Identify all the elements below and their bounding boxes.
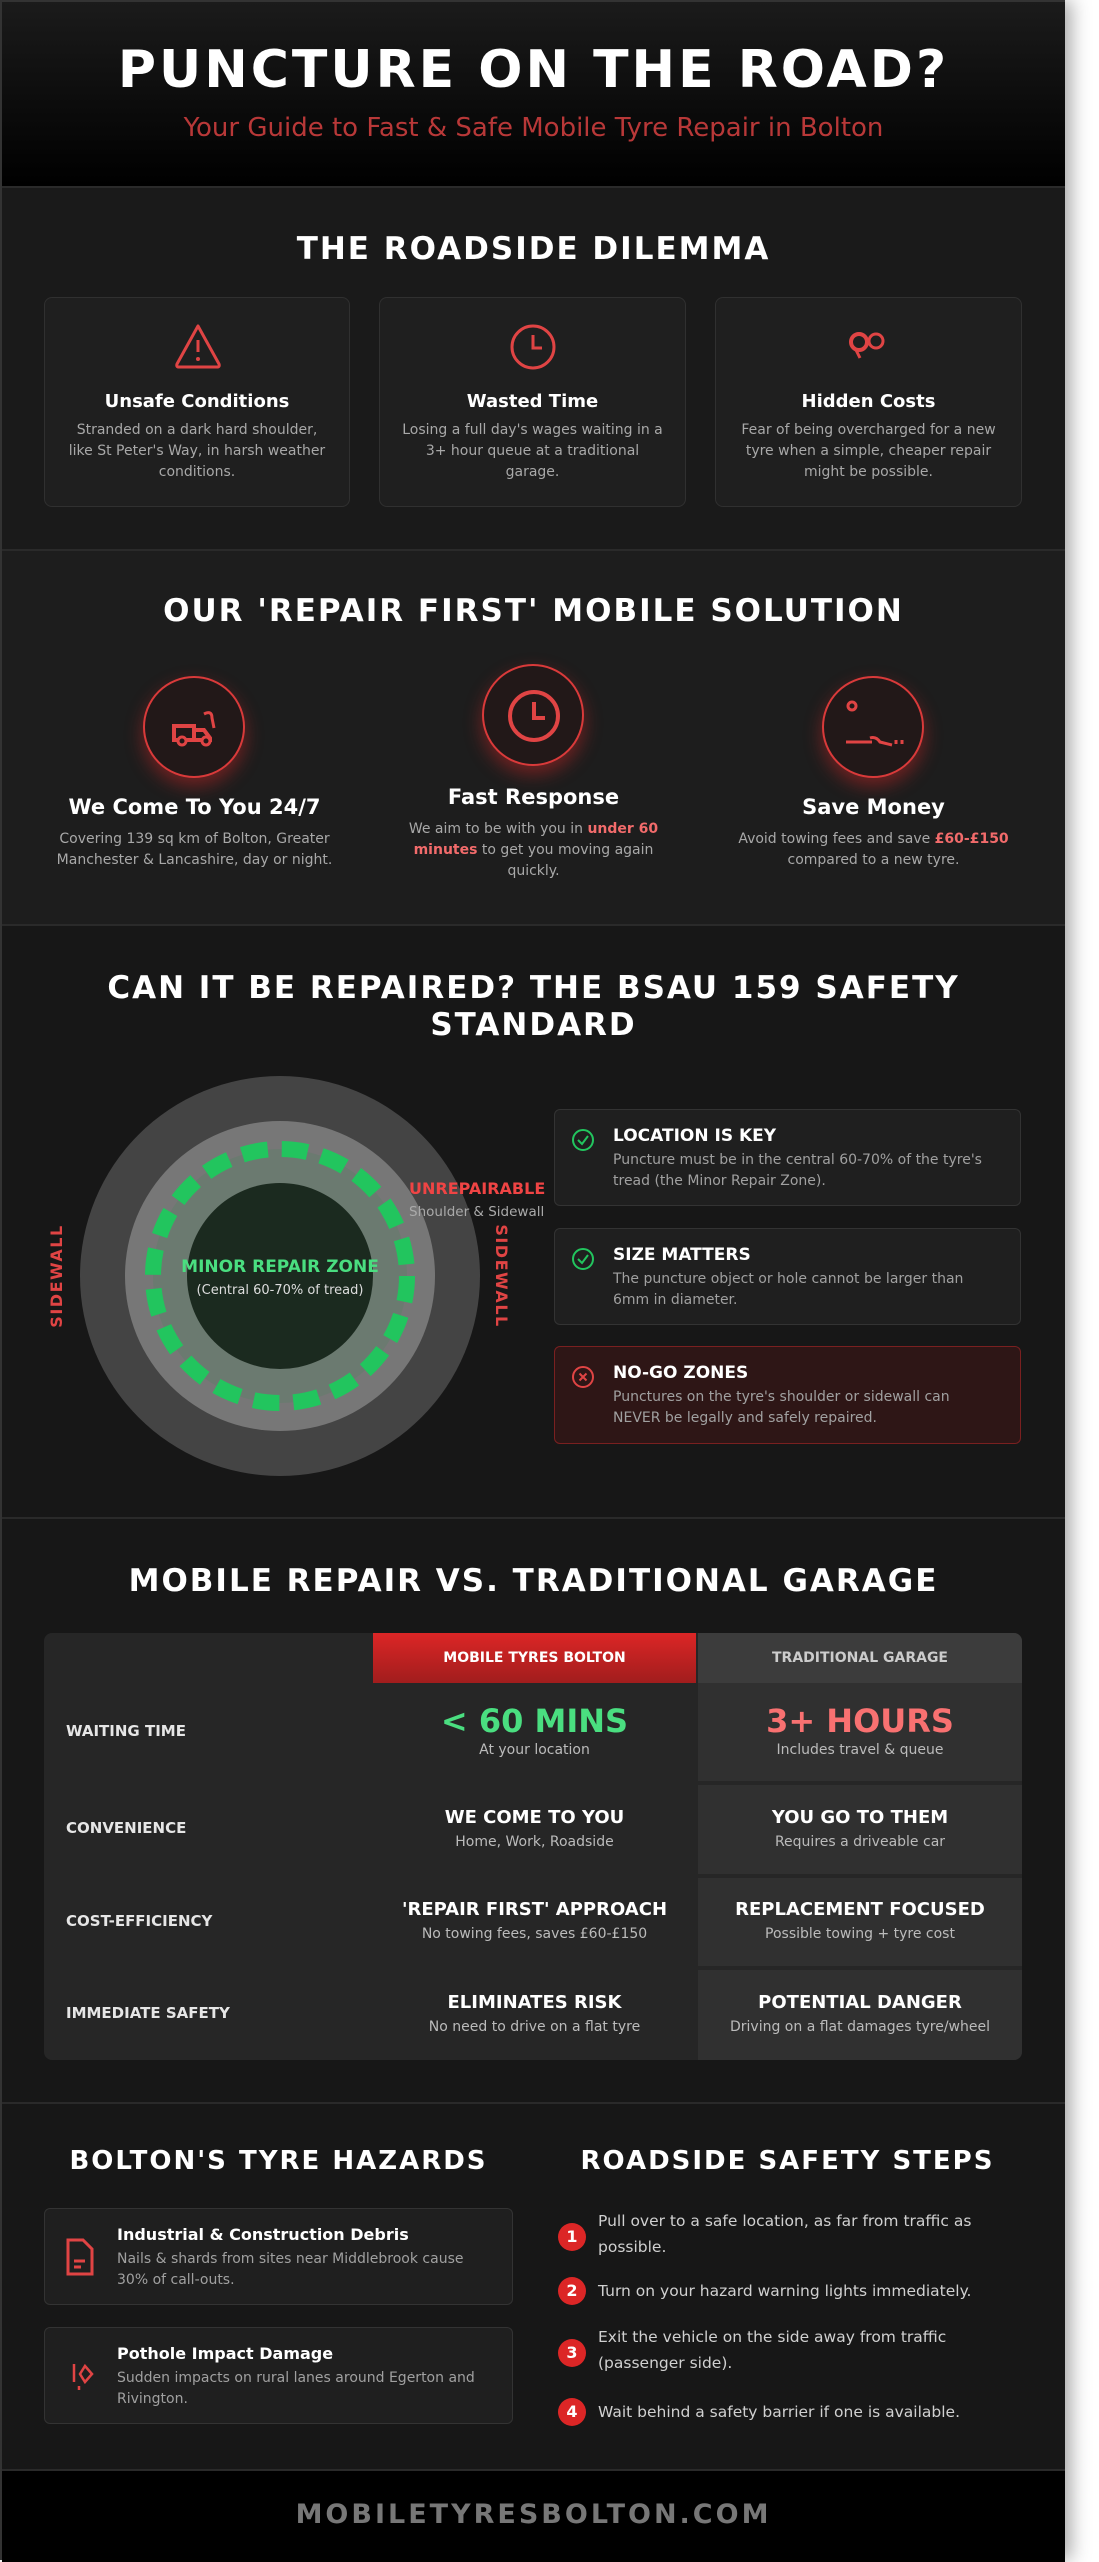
card: unsafe <box>44 297 350 507</box>
title: PUNCTURE ON THE ROAD? <box>118 40 949 100</box>
header <box>2 2 1065 188</box>
comparison table: YOU GO TO THEM <box>772 1807 948 1828</box>
comparison table: IMMEDIATE SAFETY <box>66 2004 230 2022</box>
tyre diagram: Shoulder & Sidewall <box>409 1204 544 1220</box>
heading: hazards: BOLTON'S TYRE HAZARDS <box>69 2146 488 2176</box>
step 2 <box>558 2277 971 2305</box>
step 2: Turn on your hazard warning lights immediately. <box>598 2282 971 2300</box>
hazard: debris <box>44 2208 513 2305</box>
tyre diagram: SIDEWALL <box>47 1224 66 1328</box>
card: wasted time: Wasted Time <box>467 391 598 412</box>
footer: MOBILETYRESBOLTON.COM <box>296 2499 771 2530</box>
heading: CAN IT BE REPAIRED? THE BSAU 159 SAFETY <box>107 970 960 1006</box>
comparison table: Home, Work, Roadside <box>455 1834 614 1850</box>
card: unsafe: Unsafe Conditions <box>105 391 289 412</box>
card: unsafe: Stranded on a dark hard shoulder, like St Peter's Way, in harsh weather conditions. <box>69 422 325 480</box>
footer <box>2 2471 1065 2562</box>
rule: size: The puncture object or hole cannot be larger than 6mm in diameter. <box>613 1271 963 1308</box>
feature: fast response: We aim to be with you in under 60 minutes to get you moving again quickly. <box>409 821 658 879</box>
rule: size <box>554 1228 1021 1325</box>
comparison table: Requires a driveable car <box>775 1834 945 1850</box>
comparison table <box>44 1633 1022 2060</box>
feature: save money: Avoid towing fees and save £60-£150 compared to a new tyre. <box>738 831 1009 868</box>
feature: come to you: We Come To You 24/7 <box>68 795 320 819</box>
comparison table: Driving on a flat damages tyre/wheel <box>730 2019 990 2035</box>
heading: safety steps: ROADSIDE SAFETY STEPS <box>581 2146 994 2176</box>
panel: comparison <box>2 1519 1065 2104</box>
comparison table: WE COME TO YOU <box>445 1807 624 1828</box>
panel: roadside dilemma <box>2 188 1065 551</box>
tyre diagram: MINOR REPAIR ZONE <box>181 1257 379 1277</box>
comparison table: Includes travel & queue <box>776 1742 944 1758</box>
icon: clock <box>510 324 556 370</box>
tyre diagram <box>47 1076 545 1476</box>
feature: come to you: Covering 139 sq km of Bolton, Greater Manchester & Lancashire, day or night. <box>57 831 332 868</box>
rule: location: Puncture must be in the central 60-70% of the tyre's tread (the Minor Repair Zone). <box>613 1152 982 1189</box>
rule: no-go: Punctures on the tyre's shoulder or sidewall can NEVER be legally and safely repaired. <box>613 1389 950 1426</box>
comparison table: No need to drive on a flat tyre <box>429 2019 640 2035</box>
feature: save money: Save Money <box>802 795 945 819</box>
card: wasted time: Losing a full day's wages waiting in a 3+ hour queue at a traditional garage. <box>402 422 663 480</box>
hazard: pothole: Sudden impacts on rural lanes around Egerton and Rivington. <box>117 2370 475 2407</box>
icon: coins <box>849 332 884 359</box>
comparison table: No towing fees, saves £60-£150 <box>422 1926 647 1942</box>
icon: clock <box>482 664 584 766</box>
card: wasted time <box>379 297 686 507</box>
comparison table: Possible towing + tyre cost <box>765 1926 955 1942</box>
hazard: pothole: Pothole Impact Damage <box>117 2344 333 2363</box>
comparison table: MOBILE TYRES BOLTON <box>443 1650 626 1666</box>
comparison table: TRADITIONAL GARAGE <box>772 1650 948 1666</box>
tyre diagram: (Central 60-70% of tread) <box>197 1283 363 1298</box>
tyre diagram: UNREPAIRABLE <box>409 1179 545 1198</box>
rule: no-go: NO-GO ZONES <box>613 1363 748 1383</box>
panel: mobile solution <box>2 551 1065 926</box>
icon: warning <box>175 324 221 368</box>
heading: OUR 'REPAIR FIRST' MOBILE SOLUTION <box>163 593 904 629</box>
rule: location <box>554 1109 1021 1206</box>
comparison table: WAITING TIME <box>66 1722 186 1740</box>
panel: hazards and safety <box>2 2104 1065 2471</box>
comparison table: ELIMINATES RISK <box>448 1992 621 2013</box>
rule: location: LOCATION IS KEY <box>613 1126 776 1146</box>
feature: fast response <box>409 662 658 879</box>
step 4: Wait behind a safety barrier if one is available. <box>598 2403 960 2421</box>
comparison table: 3+ HOURS <box>766 1702 954 1740</box>
card: hidden costs: Fear of being overcharged for a new tyre when a simple, cheaper repair might be possible. <box>741 422 996 480</box>
rule: no-go <box>554 1346 1021 1444</box>
step 2: 2 <box>566 2281 578 2300</box>
card: hidden costs: Hidden Costs <box>802 391 935 412</box>
card: hidden costs <box>715 297 1022 507</box>
heading <box>107 970 960 1043</box>
subtitle: Your Guide to Fast & Safe Mobile Tyre Repair in Bolton <box>184 113 883 143</box>
comparison table: At your location <box>479 1742 590 1758</box>
rule: size: SIZE MATTERS <box>613 1245 751 1265</box>
comparison table: < 60 MINS <box>441 1702 628 1740</box>
feature: come to you <box>57 674 332 868</box>
panel: BSAU 159 <box>2 926 1065 1519</box>
step 1: 1 <box>566 2227 578 2246</box>
step 4 <box>558 2398 960 2426</box>
step 3: 3 <box>566 2343 578 2362</box>
comparison table: REPLACEMENT FOCUSED <box>735 1899 985 1920</box>
icon: van <box>143 676 245 778</box>
feature: fast response: Fast Response <box>448 785 619 809</box>
comparison table: POTENTIAL DANGER <box>758 1992 962 2013</box>
comparison table: 'REPAIR FIRST' APPROACH <box>402 1899 667 1920</box>
comparison table: COST-EFFICIENCY <box>66 1912 212 1930</box>
heading: STANDARD <box>430 1007 637 1043</box>
step 1: Pull over to a safe location, as far from traffic as possible. <box>598 2212 971 2256</box>
icon: money <box>822 676 924 778</box>
feature: save money <box>738 674 1009 868</box>
step 4: 4 <box>566 2402 578 2421</box>
step 3: Exit the vehicle on the side away from traffic (passenger side). <box>598 2328 946 2372</box>
heading: THE ROADSIDE DILEMMA <box>297 231 770 267</box>
hazard: debris: Nails & shards from sites near Middlebrook cause 30% of call-outs. <box>117 2251 464 2288</box>
heading: MOBILE REPAIR VS. TRADITIONAL GARAGE <box>129 1563 938 1599</box>
hazard: pothole <box>44 2327 513 2424</box>
tyre diagram: SIDEWALL <box>492 1224 511 1328</box>
comparison table: CONVENIENCE <box>66 1819 186 1837</box>
hazard: debris: Industrial & Construction Debris <box>117 2225 409 2244</box>
